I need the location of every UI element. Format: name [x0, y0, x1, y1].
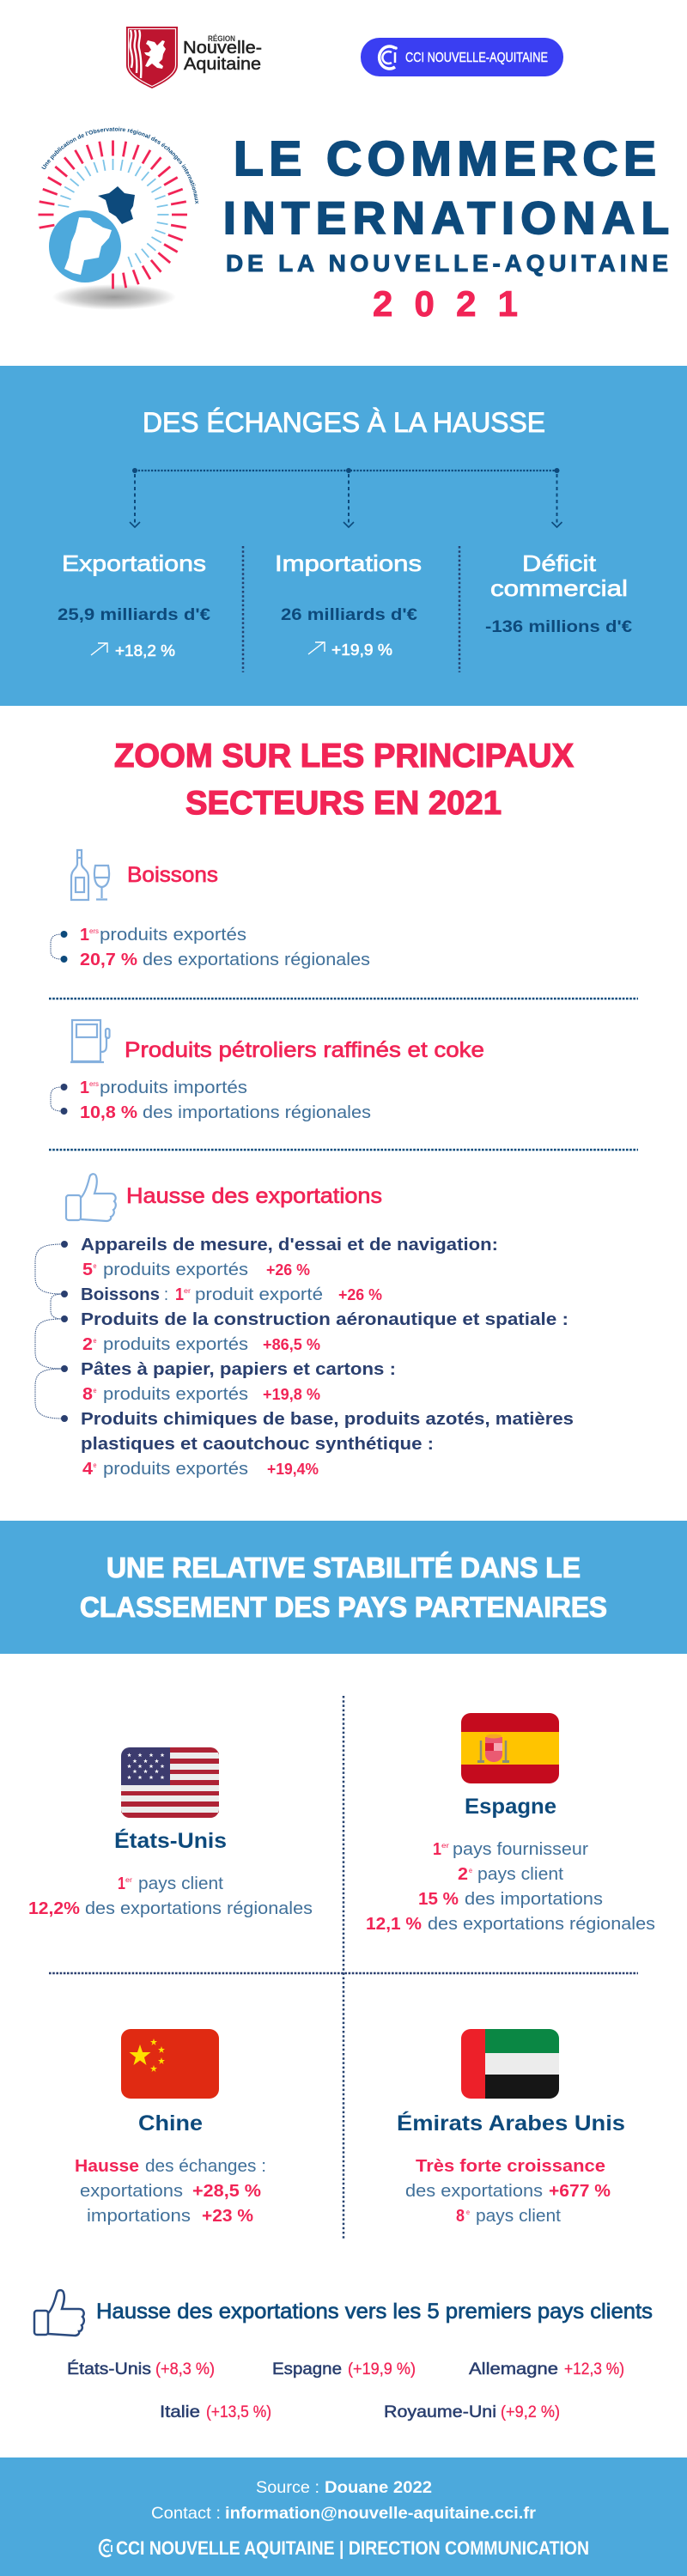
logo: CCI Nouvelle-Aquitaine pill: CCI NOUVELLE-AQUITAINE [405, 51, 548, 65]
country list: +12,3 %) [564, 2360, 624, 2379]
logo: CCI Nouvelle-Aquitaine pill [361, 38, 563, 76]
section: boissons [51, 850, 370, 969]
item: construction aéronautique: 2 [82, 1334, 93, 1354]
item: appareils de mesure: Appareils de mesure, d'essai et de navigation: [81, 1235, 498, 1255]
panel: relative stabilité heading band: CLASSEMENT DES PAYS PARTENAIRES [80, 1591, 607, 1623]
source line: Contact : [151, 2504, 221, 2523]
column: importations: Importations [275, 550, 422, 576]
bullets: 20,7 % [80, 950, 137, 969]
panel: Espagne: 12,1 % [366, 1914, 422, 1934]
dotted bullet connectors [35, 1241, 68, 1422]
item: boissons: 1 [175, 1285, 184, 1304]
item: produits chimiques: produits exportés [103, 1459, 248, 1479]
item: appareils de mesure: +26 % [266, 1261, 310, 1279]
item: pâtes à papier: 8 [82, 1384, 93, 1404]
bullets: produits exportés [100, 925, 246, 945]
title: DE LA NOUVELLE-AQUITAINE [226, 250, 668, 276]
panel: relative stabilité heading band [0, 1521, 687, 1654]
panel: Chine: importations [87, 2206, 191, 2226]
panel: Émirats Arabes Unis: 8 [456, 2206, 465, 2226]
panel: Espagne: des exportations régionales [428, 1914, 655, 1934]
country list: Royaume-Uni [384, 2403, 496, 2421]
panel: Espagne: Espagne [465, 1795, 556, 1819]
icon: thumbs up [66, 1174, 116, 1221]
section heading: Boissons [127, 863, 218, 887]
panel: Espagne: 15 % [418, 1889, 459, 1909]
panel: relative stabilité heading band: UNE RELATIVE STABILITÉ DANS LE [106, 1552, 581, 1583]
item: produits chimiques: plastiques et caoutchouc synthétique : [81, 1434, 434, 1454]
item: produits chimiques [81, 1409, 574, 1479]
bullets [51, 925, 370, 969]
connector arrows [130, 468, 562, 527]
item: construction aéronautique [81, 1309, 568, 1354]
title: LE COMMERCE [234, 131, 656, 186]
item: boissons: produit exporté [195, 1285, 323, 1304]
section: top 5 client countries [34, 2290, 653, 2421]
item: pâtes à papier: e [93, 1387, 97, 1394]
panel: Espagne: 1 [433, 1839, 441, 1859]
title [223, 131, 669, 324]
panel: Espagne: e [469, 1867, 472, 1874]
country list: Espagne [272, 2360, 342, 2379]
source line: information@nouvelle-aquitaine.cci.fr [225, 2504, 536, 2523]
panel: Chine: des échanges : [145, 2156, 266, 2176]
item: boissons: er [184, 1287, 191, 1295]
heading: zoom sur les principaux secteurs: SECTEURS EN 2021 [185, 785, 502, 822]
emblem: observatoire logo with radial ticks [38, 127, 199, 309]
country list: (+9,2 %) [501, 2403, 560, 2421]
item: pâtes à papier [81, 1359, 396, 1404]
item: appareils de mesure: produits exportés [103, 1260, 248, 1279]
panel: Chine [75, 2029, 266, 2226]
panel: Chine: Hausse [75, 2156, 139, 2176]
item: pâtes à papier: Pâtes à papier, papiers et cartons : [81, 1359, 396, 1379]
panel: footer [0, 2458, 687, 2576]
bullets: des importations régionales [143, 1103, 371, 1122]
logo: Région Nouvelle-Aquitaine [126, 27, 262, 88]
column: exportations: +18,2 % [115, 642, 175, 659]
source line [151, 2478, 536, 2523]
panel: États-Unis: er [125, 1876, 132, 1884]
item: pâtes à papier: produits exportés [103, 1384, 248, 1404]
country list [67, 2359, 624, 2421]
panel: Espagne: 2 [458, 1864, 468, 1884]
column: déficit commercial: -136 millions d'€ [485, 618, 632, 636]
icon: Spanish flag [461, 1713, 559, 1783]
country list: (+8,3 %) [155, 2360, 215, 2379]
icon: US flag [121, 1747, 219, 1818]
panel: Espagne: pays client [477, 1864, 563, 1884]
section: hausse des exportations [35, 1174, 574, 1479]
panel: Émirats Arabes Unis [397, 2029, 625, 2226]
item: produits chimiques: Produits chimiques de base, produits azotés, matières [81, 1409, 574, 1429]
panel: Chine: +28,5 % [192, 2181, 261, 2201]
bullets: des exportations régionales [143, 950, 370, 969]
item: appareils de mesure [81, 1235, 498, 1279]
country list: Allemagne [469, 2360, 558, 2379]
bullets: 10,8 % [80, 1103, 137, 1122]
panel: Chine: Chine [138, 2111, 203, 2136]
country list: États-Unis [67, 2359, 151, 2379]
item: construction aéronautique: e [93, 1337, 97, 1345]
logo: Région Nouvelle-Aquitaine: Nouvelle- [183, 39, 262, 58]
icon: UAE flag [461, 2029, 559, 2099]
heading: zoom sur les principaux secteurs: ZOOM SUR LES PRINCIPAUX [114, 738, 574, 775]
bullets [51, 1078, 371, 1122]
bullets: 1 [80, 1078, 89, 1097]
source line: Source : [256, 2478, 319, 2497]
item: produits chimiques: +19,4% [267, 1461, 319, 1478]
icon: Chinese flag [121, 2029, 219, 2099]
column: importations: +19,9 % [331, 641, 392, 659]
column: déficit commercial: Déficit [522, 550, 597, 576]
panel: Émirats Arabes Unis: pays client [476, 2206, 561, 2226]
column: exportations: 25,9 milliards d'€ [58, 606, 211, 624]
column: déficit commercial [485, 550, 632, 636]
column: exportations: Exportations [62, 550, 206, 576]
item: appareils de mesure: e [93, 1262, 97, 1270]
column: importations [275, 550, 422, 659]
source line: Douane 2022 [325, 2478, 432, 2497]
section heading: Produits pétroliers raffinés et coke [125, 1038, 484, 1062]
country list: Italie [160, 2403, 200, 2421]
panel: Émirats Arabes Unis: des exportations [405, 2181, 543, 2201]
item: boissons [81, 1285, 382, 1304]
panel: Émirats Arabes Unis: e [466, 2208, 470, 2216]
column: exportations [58, 550, 211, 659]
heading: zoom sur les principaux secteurs [114, 738, 574, 822]
panel: Espagne: des importations [465, 1889, 603, 1909]
logo: Région Nouvelle-Aquitaine: RÉGION [208, 34, 235, 43]
icon: thumbs up [34, 2290, 84, 2336]
item: construction aéronautique: +86,5 % [263, 1336, 320, 1353]
heading: Hausse des exportations vers les 5 premiers pays clients [96, 2300, 653, 2324]
item: pâtes à papier: +19,8 % [263, 1386, 320, 1403]
panel: États-Unis: des exportations régionales [85, 1899, 313, 1918]
panel: Émirats Arabes Unis: +677 % [549, 2181, 611, 2201]
section: produits pétroliers [51, 1020, 484, 1122]
bullets: ers [89, 1080, 99, 1088]
icon: bottle and wine glass [71, 850, 109, 900]
title: 2 0 2 1 [373, 283, 518, 324]
icon: fuel pump [70, 1020, 110, 1062]
item: appareils de mesure: 5 [82, 1260, 93, 1279]
column: déficit commercial: commercial [490, 575, 628, 601]
bullets: 1 [80, 925, 89, 945]
column: importations: 26 milliards d'€ [281, 606, 417, 624]
bullets: produits importés [100, 1078, 247, 1097]
item: produits chimiques: 4 [82, 1459, 94, 1479]
panel: des échanges à la hausse [0, 366, 687, 706]
panel: États-Unis: États-Unis [114, 1828, 227, 1853]
panel: États-Unis: 1 [118, 1874, 125, 1893]
bullets: ers [89, 927, 99, 935]
country list: (+19,9 %) [348, 2360, 416, 2379]
item: boissons: : [164, 1285, 168, 1304]
panel: Émirats Arabes Unis: Émirats Arabes Unis [397, 2111, 625, 2136]
logo: Région Nouvelle-Aquitaine: Aquitaine [184, 55, 261, 74]
panel: États-Unis: pays client [138, 1874, 223, 1893]
section heading: Hausse des exportations [126, 1184, 382, 1208]
panel: Chine: exportations [80, 2181, 183, 2201]
item: construction aéronautique: Produits de la construction aéronautique et spatiale : [81, 1309, 568, 1329]
item: boissons: +26 % [338, 1286, 382, 1303]
panel: Espagne [366, 1713, 655, 1934]
panel: Émirats Arabes Unis: Très forte croissance [416, 2156, 605, 2176]
panel: États-Unis: 12,2% [28, 1899, 80, 1918]
panel: Chine: +23 % [202, 2206, 253, 2226]
country list: (+13,5 %) [206, 2403, 271, 2421]
heading: DES ÉCHANGES À LA HAUSSE [143, 407, 545, 438]
item: boissons: Boissons [81, 1285, 160, 1304]
credit line: CCI NOUVELLE AQUITAINE | DIRECTION COMMUNICATION [116, 2537, 589, 2559]
title: INTERNATIONAL [223, 193, 669, 244]
item: construction aéronautique: produits exportés [103, 1334, 248, 1354]
emblem: observatoire logo with radial ticks: Une publication de l'Observatoire régional des échanges internationaux [41, 127, 199, 204]
item: produits chimiques: e [93, 1461, 97, 1469]
panel: États-Unis [28, 1747, 313, 1918]
panel: Espagne: er [441, 1842, 449, 1850]
panel: Espagne: pays fournisseur [453, 1839, 588, 1859]
